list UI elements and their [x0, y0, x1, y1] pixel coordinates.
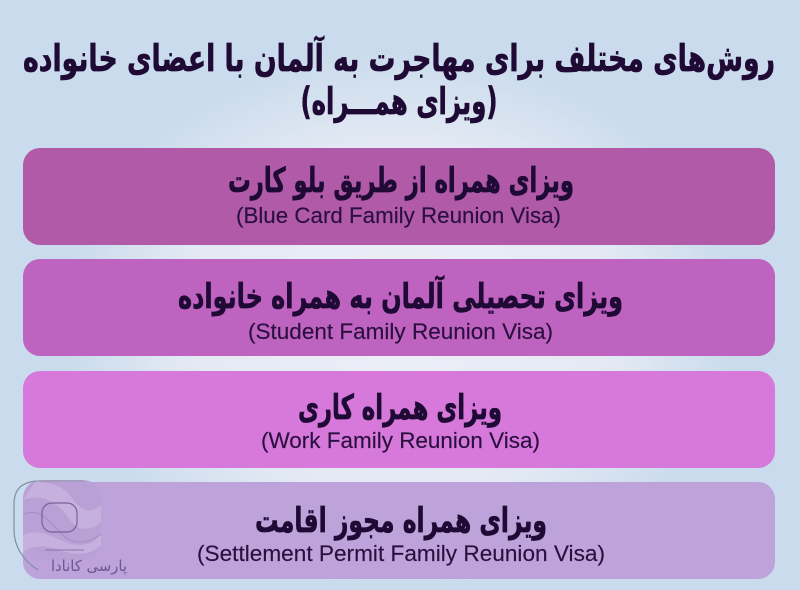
panel: work family visa: (Work Family Reunion Visa) — [261, 428, 540, 453]
icon: watermark logo — [14, 480, 127, 576]
panel: blue card family visa: (Blue Card Family Reunion Visa) — [236, 203, 561, 228]
panel: settlement permit family visa: ویزای همراه مجوز اقامت — [255, 501, 547, 541]
panel: blue card family visa: ویزای همراه از طریق بلو کارت — [228, 161, 574, 201]
title — [23, 35, 775, 123]
panel: blue card family visa — [23, 148, 775, 245]
panel: student family visa: (Student Family Reunion Visa) — [248, 319, 553, 344]
panel: work family visa: ویزای همراه کاری — [298, 388, 502, 428]
icon: watermark logo: پارسی کانادا — [51, 557, 127, 576]
panel: settlement permit family visa: (Settlement Permit Family Reunion Visa) — [197, 541, 605, 566]
panel: work family visa — [23, 371, 775, 468]
title: (ویزای همـــراه) — [300, 80, 498, 123]
panel: student family visa — [23, 259, 775, 356]
panel: student family visa: ویزای تحصیلی آلمان به همراه خانواده — [178, 275, 623, 317]
panel: settlement permit family visa — [23, 482, 775, 579]
